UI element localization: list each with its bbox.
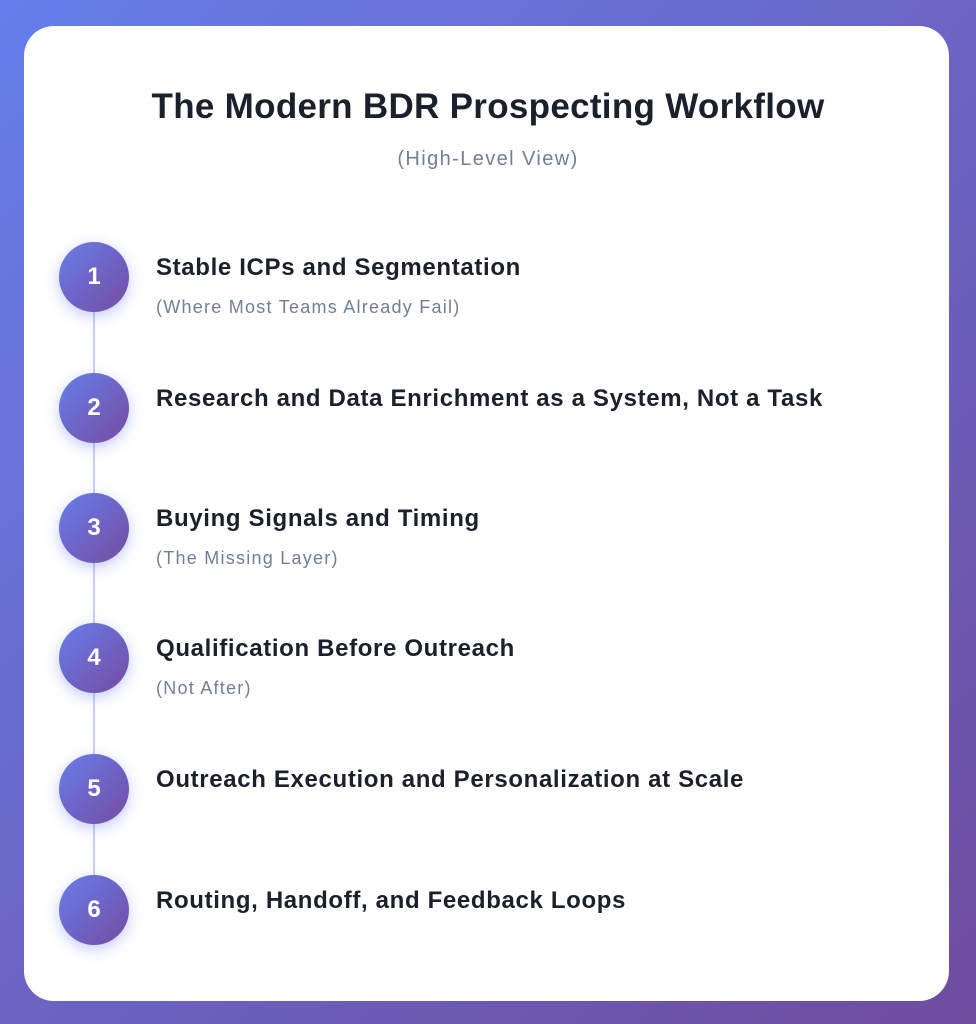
step 2 heading: Research and Data Enrichment as a System, Not a Task xyxy=(156,385,823,412)
icon: number 3 xyxy=(59,493,129,563)
icon: number 5: 5 xyxy=(87,775,101,802)
icon: number 4 xyxy=(59,623,129,693)
step 4 xyxy=(52,620,515,704)
step 5 heading: Outreach Execution and Personalization at Scale xyxy=(156,766,744,793)
icon: number 6: 6 xyxy=(87,896,101,923)
icon: number 1 xyxy=(59,242,129,312)
step 1 xyxy=(52,239,521,323)
subtitle: (High-Level View) xyxy=(397,148,579,170)
step 4 heading: Qualification Before Outreach xyxy=(156,635,515,662)
step 1 note: (Where Most Teams Already Fail) xyxy=(156,297,460,317)
icon: number 2 xyxy=(59,373,129,443)
step 2 xyxy=(52,370,823,454)
step 3 note: (The Missing Layer) xyxy=(156,548,339,568)
icon: number 1: 1 xyxy=(87,263,101,290)
step 6 heading: Routing, Handoff, and Feedback Loops xyxy=(156,887,626,914)
icon: number 6 xyxy=(59,875,129,945)
step 1 heading: Stable ICPs and Segmentation xyxy=(156,254,521,281)
timeline connector xyxy=(93,277,95,910)
icon: number 4: 4 xyxy=(87,644,101,671)
step 5 xyxy=(52,751,744,835)
step 3 heading: Buying Signals and Timing xyxy=(156,505,480,532)
icon: number 2: 2 xyxy=(87,394,101,421)
icon: number 3: 3 xyxy=(87,514,101,541)
step 6 xyxy=(52,872,626,956)
step 3 xyxy=(52,490,480,574)
icon: number 5 xyxy=(59,754,129,824)
title: The Modern BDR Prospecting Workflow xyxy=(152,87,824,126)
step 4 note: (Not After) xyxy=(156,678,252,698)
